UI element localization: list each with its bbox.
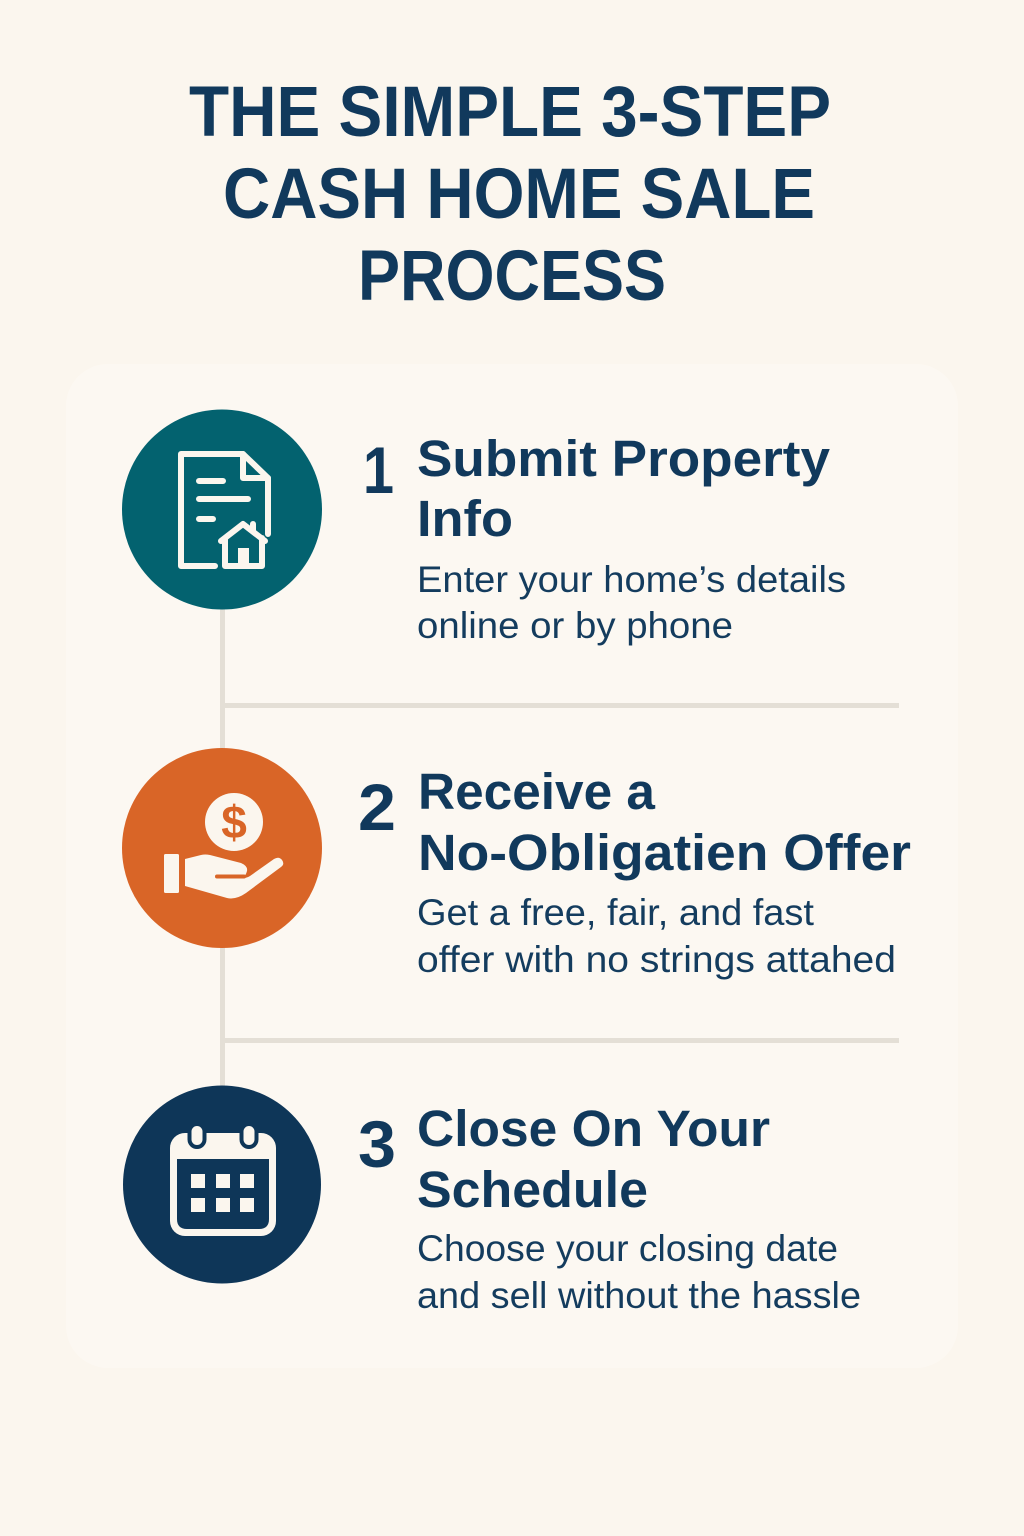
title: THE SIMPLE 3-STEP bbox=[189, 73, 831, 152]
number 2: 2 bbox=[358, 770, 396, 844]
title: PROCESS bbox=[358, 237, 666, 316]
heading 1: Submit Property bbox=[417, 430, 831, 487]
icon: document with house bbox=[122, 410, 322, 610]
heading 1: Info bbox=[417, 490, 513, 547]
description 2 bbox=[417, 892, 896, 980]
step 1 bbox=[122, 410, 846, 646]
description 2: Get a free, fair, and fast bbox=[417, 892, 815, 933]
heading 3: Schedule bbox=[417, 1161, 648, 1218]
heading 2: No-Obligatien Offer bbox=[418, 824, 911, 881]
step 2 bbox=[122, 748, 911, 980]
description 2: offer with no strings attahed bbox=[417, 939, 896, 980]
description 3 bbox=[417, 1228, 861, 1316]
timeline connector bbox=[220, 605, 899, 1092]
description 3: Choose your closing date bbox=[417, 1228, 838, 1269]
icon: calendar bbox=[123, 1086, 321, 1284]
panel: steps bbox=[66, 364, 958, 1368]
number 1: 1 bbox=[363, 433, 394, 507]
title bbox=[189, 73, 831, 316]
heading 2 bbox=[418, 763, 911, 881]
description 3: and sell without the hassle bbox=[417, 1275, 861, 1316]
title: CASH HOME SALE bbox=[223, 155, 815, 234]
heading 3: Close On Your bbox=[417, 1100, 770, 1157]
description 1: Enter your home’s details bbox=[417, 559, 846, 600]
icon: hand holding coin bbox=[122, 748, 322, 948]
description 1: online or by phone bbox=[417, 605, 733, 646]
step 3 bbox=[123, 1086, 861, 1316]
heading 3 bbox=[417, 1100, 770, 1218]
heading 2: Receive a bbox=[418, 763, 656, 820]
heading 1 bbox=[417, 430, 831, 547]
icon: hand holding coin: $ bbox=[221, 796, 247, 848]
number 3: 3 bbox=[358, 1107, 396, 1181]
description 1 bbox=[417, 559, 846, 646]
